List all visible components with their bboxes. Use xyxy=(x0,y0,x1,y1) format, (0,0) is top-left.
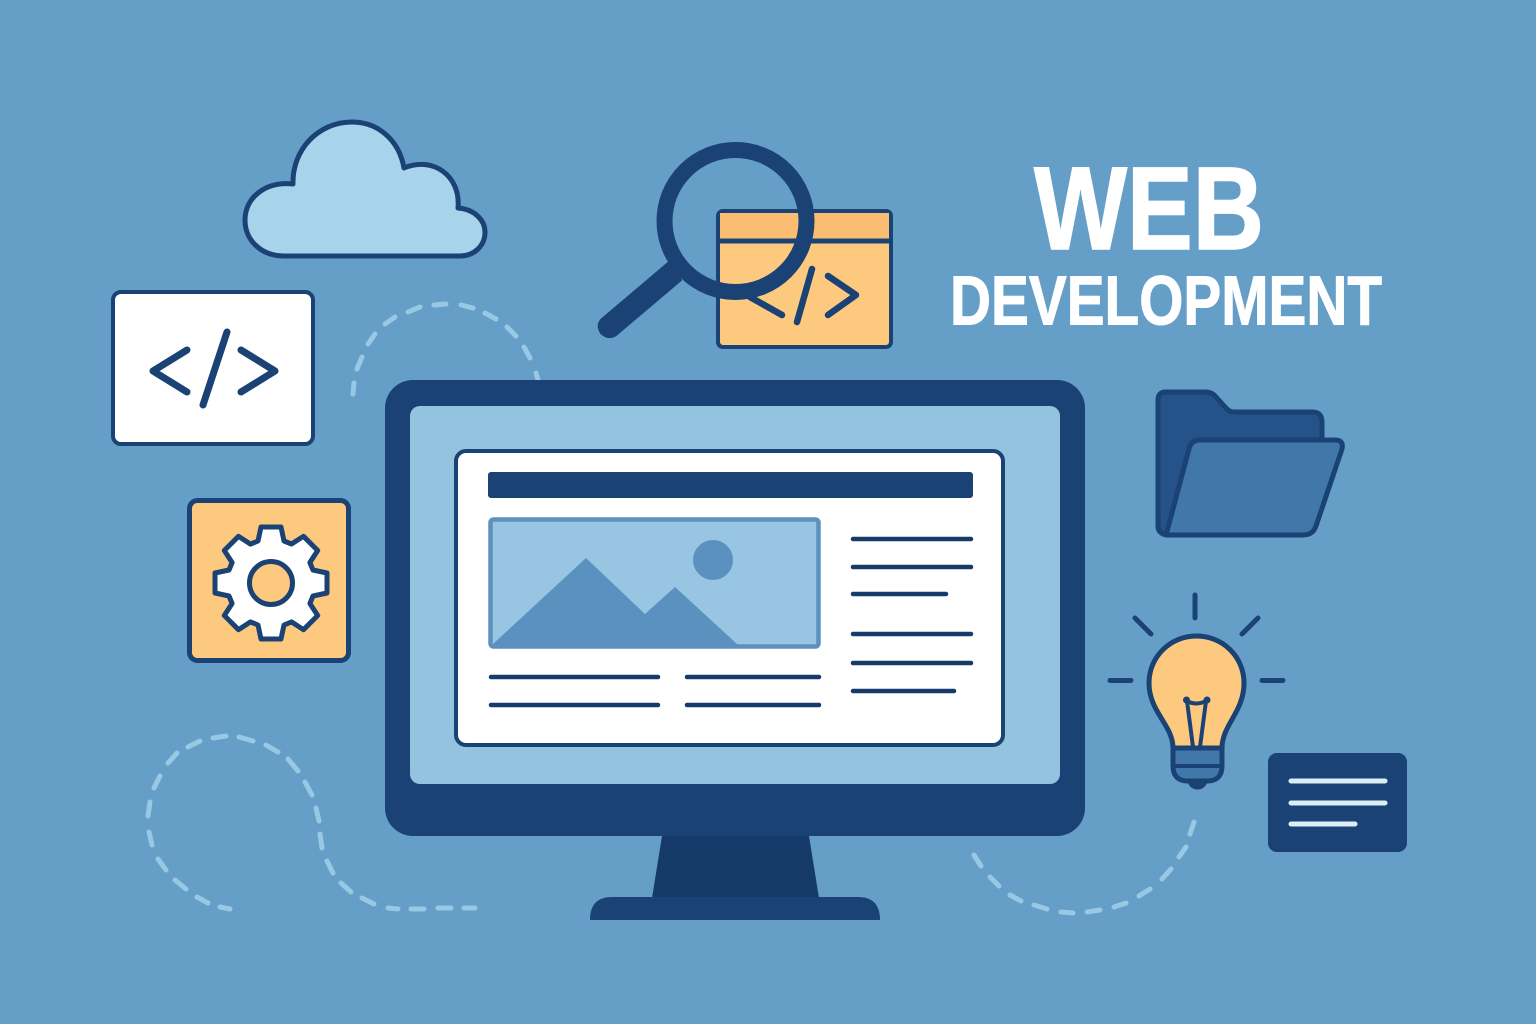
icon: code window orange xyxy=(718,211,891,347)
dashed path: bottom right xyxy=(974,822,1194,913)
icon: message card xyxy=(1268,753,1407,852)
web page panel xyxy=(456,451,1003,745)
image placeholder xyxy=(490,520,818,647)
icon: folder xyxy=(1158,392,1342,535)
title xyxy=(950,143,1382,340)
title: DEVELOPMENT xyxy=(950,262,1382,340)
monitor bezel xyxy=(385,380,1085,836)
icon: magnifying glass xyxy=(599,150,806,337)
icon: gear tile xyxy=(190,500,348,660)
monitor stand xyxy=(652,836,819,898)
dashed path: bottom left xyxy=(148,736,475,909)
text lines xyxy=(491,539,971,705)
icon: light bulb xyxy=(1110,595,1283,790)
monitor base xyxy=(590,897,880,920)
icon: code window white xyxy=(113,292,313,444)
title: WEB xyxy=(1034,143,1264,275)
header bar xyxy=(488,472,973,498)
monitor xyxy=(385,380,1085,920)
icon: cloud xyxy=(245,122,485,256)
monitor screen xyxy=(410,406,1060,784)
dashed path: top left xyxy=(353,304,538,394)
